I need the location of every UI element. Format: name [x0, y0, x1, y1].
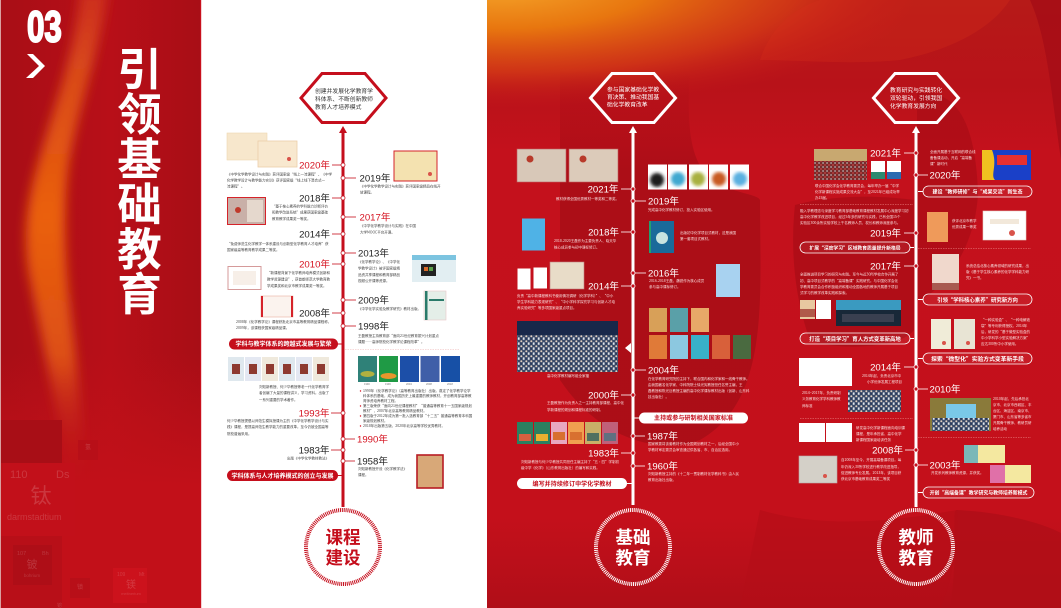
node: 2019: 2019年	[870, 228, 901, 240]
node: 1998: 王磊教授主持教育部“面向21世纪教育振兴计划重点	[358, 333, 439, 339]
node: 2013	[341, 248, 456, 284]
node: 1993: 何少华教授提倡以师范生模拟授课为主的《中学化学教学设计与实	[227, 418, 329, 424]
node: 2016	[631, 264, 740, 297]
group photo: 高中化学教材编写组全家福	[547, 373, 589, 379]
node: 1960: 刘知新教授主持的《十二年一贯制教材化学教科书》由人民	[648, 471, 739, 477]
node: 2020: 全面开展基于互联网的联合线	[930, 149, 976, 155]
node: 2000	[547, 390, 635, 413]
periodic table tiles: 109	[117, 572, 126, 578]
node: 2014	[799, 358, 918, 412]
textbook notes list: 家级规划教材。	[363, 418, 388, 424]
new curriculum training: 课程，是年承担省、高中化学	[856, 431, 902, 437]
pill: interdisciplinary development: 学科与教学体系的跨越式发展与繁荣	[236, 339, 332, 348]
node: 2021	[517, 149, 635, 202]
node: 1983: 刘知新教授与何少华教授共同担任主编主持了“五·四”学制初	[521, 459, 619, 465]
node: 2017: 式学习的教学改革实践和探索。	[800, 290, 849, 296]
textbooks 2004	[649, 308, 751, 359]
textbook notes list: 第三版荣获“面向21世纪课程教材”“普通高等教育十一五国家级规划	[363, 403, 472, 409]
new curriculum training: 新课程国家级培训任务	[856, 437, 891, 443]
textbook notes list: 科体系的基础，成为我国历史上最重要的教师教材，开创教育部高等教	[363, 393, 472, 399]
node: 2004: 由我国著名化学家、中科院院士徐光宪教授担任名誉主编，王	[648, 382, 743, 388]
circle label: teacher education: 教师	[898, 524, 934, 550]
microscale experiment patents: “一种实验盒”、“一种电解液	[981, 317, 1030, 323]
node: 1958: 刘知新教授开设《化学教学法》	[358, 466, 407, 472]
pill: teacher training ecosystem	[918, 186, 1032, 197]
node: 2008: 2008年《化学教学论》课程获批北京市高等教育精品课程称。	[236, 319, 331, 325]
node: 2017	[800, 254, 1029, 326]
node: 2020: 化学教学设计与教学能力实训》获评国家级“线上线下混合式一	[227, 178, 325, 184]
node: 1993: 践》课程，是提高师范生教学能力的重要改革。至今仍被全国高等	[227, 424, 329, 430]
node: 2016: 2016年	[648, 268, 679, 280]
node: 2009: 《中学化学实验及教学研究》教材出版。	[358, 306, 421, 312]
node: 1983: 出版《中学化学教材教法》	[287, 456, 329, 462]
timeline axis with arrow	[339, 126, 347, 507]
node: 2019: 放课程。	[360, 190, 374, 196]
circle label: basic education: 基础	[616, 524, 650, 550]
node: 2021: 办15届。	[815, 195, 829, 201]
node: 2017: 大学MOOC平台开课。	[360, 230, 395, 236]
node: 1983	[287, 444, 345, 462]
node: 1987: 1987年	[647, 430, 678, 442]
pill: project learning: 打造“项目学习”育人方式变革新高地	[809, 335, 901, 343]
node: 2010: 2010年	[930, 384, 961, 396]
node: 2018	[228, 192, 345, 224]
panel: basic education timeline	[517, 74, 751, 584]
node: 2017: 版《基于学生核心素养的化学学科能力研	[966, 269, 1029, 275]
hexagon heading: 参与国家基础化学教	[607, 84, 659, 94]
node: 2014: 师标准	[802, 403, 813, 409]
node: 2018: 第一套项目式教材。	[680, 236, 712, 242]
node: 1958: 1958年	[357, 456, 388, 468]
pill: core literacy: 引领“学科核心素养”研究新方向	[937, 296, 1018, 304]
node: 2010	[914, 384, 1032, 432]
textbook notes list	[360, 388, 473, 429]
node: 2018: 2018年	[299, 192, 330, 204]
circle label: course building: 课程	[326, 524, 360, 550]
node: 2014: 养实验研究”等多项国家级重点项目。	[517, 305, 576, 311]
node: 2018: “基于核心素养的学科能力诊断评价	[272, 204, 328, 210]
node: 2014: 小学优师发展工程项目	[867, 379, 902, 385]
node: 2014: 2014年	[588, 280, 619, 292]
node: 1990	[341, 434, 388, 446]
circle label: course building	[306, 510, 380, 584]
node: 2018: 和教学改进系统”成果获国家级基础	[272, 210, 328, 216]
pill: high-end lesson planning	[918, 487, 1034, 498]
microscale experiment patents: 中小学科学小型实验解决方案”	[981, 335, 1030, 341]
pill: micro experiment: 探索“微型化”实验方式变革新手段	[931, 354, 1024, 363]
node: 2019: 2019年	[360, 172, 391, 184]
hexagon heading	[590, 74, 676, 122]
pill: interdisciplinary development	[229, 338, 342, 350]
pill: teacher training ecosystem: 建设“教师研修”与“成果交流”新生态	[932, 189, 1023, 196]
node: 2008	[799, 444, 918, 483]
node: 2003: 开发系列教师教育资源，并获奖。	[931, 470, 984, 476]
new curriculum training	[799, 423, 905, 443]
node: 2014: 2014年起，负责北京市中	[862, 373, 902, 379]
node: 2019: 实验区300余所实验学校上千名教师人员，权长和教师深度参与。	[800, 220, 900, 226]
node: 2013: 品资共享课程和教育部精品	[358, 272, 400, 278]
circle label: teacher education	[879, 510, 953, 584]
node: 1987: 国家教委将该套教材作为全国规划教材之一，后经全国中小	[648, 441, 739, 447]
node: 2014: 2014年	[870, 362, 901, 374]
node: 2019: 完成高中化学教材修订，投入实验区使用。	[648, 207, 714, 213]
panel: red cover strip	[0, 0, 201, 608]
textbook notes list: 第四版于2012年成为第一批入选教育部“十二五”普通高等教育本科国	[363, 413, 473, 419]
pill: discipline founding: 学科体系与人才培养模式的创立与发展	[232, 471, 334, 480]
node: 2020: 《中学化学教学设计与实践》获评国家级“线上一流课程”、《中学	[227, 172, 332, 178]
node: 2013: 《化学教学论》、《中学化	[358, 259, 400, 265]
node: 2004: 技出版社）。	[648, 394, 669, 400]
hexagon heading: 教育研究与实践转化	[890, 85, 942, 94]
node: 2010: 教学资源建设”，获首都师范大学教育教	[267, 276, 330, 282]
node: 2018: 核心成员参与初中课标修订。	[554, 244, 600, 250]
textbook notes list: 育师资培养教材工程。	[363, 398, 398, 404]
microscale experiment patents	[931, 317, 1030, 349]
group photo	[517, 321, 618, 379]
node: 2013: 学教学设计》被评国家级精	[358, 266, 400, 272]
node: 2013: 2013年	[358, 248, 389, 260]
node: 2019	[341, 151, 441, 196]
pill: deep learning: 扩展“深度学习”区域教育质量提升新格局	[809, 245, 901, 252]
textbook editions 1990-2018: 2004	[406, 382, 412, 386]
node: 2019: 《中学化学教学设计与实践》获评国家级精品在线开	[360, 184, 441, 190]
node: 2020: 流课程”。	[227, 184, 244, 190]
panel: teacher education timeline	[799, 74, 1034, 584]
node: 2014: 学生学科能力表现研究”、“中小学科学探究学习与创新人才培	[517, 299, 615, 305]
node: 2010: 开展骨干教师、教研员研	[993, 420, 1032, 426]
node: 1983	[521, 448, 635, 471]
hexagon heading: 育决策、推动我国基	[607, 92, 659, 101]
periodic table tiles: meitnerium	[121, 591, 142, 596]
node: 2010: 学成果奖和北京市教学成果奖一等奖。	[267, 283, 326, 289]
pill: national standards	[634, 412, 748, 424]
node: 1960	[631, 460, 739, 483]
node: 2021: 教材获得全国优秀教材一等奖和二等奖。	[556, 196, 619, 202]
node: 2020	[914, 149, 1031, 182]
node: 2020: 备备课活动，开启“高端备	[930, 155, 972, 161]
pill: national standards: 主持或参与研制相关国家标准	[654, 413, 733, 422]
pill: deep learning	[800, 242, 914, 253]
node: 2019: 优秀成果一等奖	[952, 224, 977, 230]
textbook notes list: 教材”，2007年北京高等教育精品教材。	[363, 408, 427, 414]
pill: core literacy	[918, 294, 1032, 305]
periodic table tiles	[3, 440, 147, 608]
hexagon heading: 教育人才培养模式	[315, 102, 362, 111]
textbook editions 1990-2018: 2008	[426, 382, 432, 386]
periodic table tiles: 110	[10, 469, 28, 481]
node: 2017: 《中学化学教学设计与实践》在中国	[360, 223, 416, 229]
node: 2014: 负责“高中新课程教科书使用情况调研（化学学科）”、“中小	[517, 293, 614, 299]
node: 2018: 教育教学成果奖一等奖。	[272, 216, 310, 222]
node: 2017: 系统总结北核心素养领域的研究成果，出	[966, 263, 1029, 269]
node: 2014: 国家级高等教育教学成果二等奖。	[227, 247, 280, 253]
textbook editions 1990-2018: 1996	[385, 382, 391, 386]
node: 2008: 年仍深入30所学校进行教学改进指导，	[841, 464, 901, 470]
node: 2008: 2008年	[299, 308, 330, 320]
node: 2017: 2017年	[870, 260, 901, 272]
Liu Zhixin's lecture books: 者创编了大量的课程讲义，学习资料。出版了	[259, 390, 329, 396]
node: 1983: 级中学《化学》（山东教育出版社）的编写和实践。	[521, 465, 600, 471]
microscale experiment patents: 应达300所中小学使用。	[981, 341, 1018, 347]
timeline axis with arrow	[629, 126, 637, 505]
node: 2017: 初、高中项目式教学的“高端备课”实践研究。与中国化学会化	[800, 278, 898, 284]
periodic table tiles: 镇	[77, 583, 83, 591]
node: 2008: 获北京市基础教育成果奖二等奖	[841, 476, 890, 482]
node: 2019: 获评北京市教学	[952, 218, 977, 224]
node: 2019: 融入学教理念与深度学习教育部基础教育课程教材发展中心深度学习初	[800, 208, 909, 214]
periodic table tiles: Mt	[139, 572, 145, 578]
pill: textbooks	[517, 478, 632, 489]
periodic table tiles: 铍	[26, 558, 38, 571]
node: 1998	[341, 320, 439, 345]
node: 2004: 2004年	[648, 364, 679, 376]
node: 2017	[341, 212, 416, 236]
node: 2003: 2003年	[930, 460, 961, 472]
node: 2018: 出版初中化学项目式教材，这是我国	[680, 230, 736, 236]
textbook editions 1990-2018: 2018	[447, 382, 453, 386]
node: 1983: 1983年	[588, 448, 619, 460]
node: 2018: 2018年	[588, 226, 619, 238]
pill: high-end lesson planning: 开创“高端备课”教学研究与教师培养新模式	[930, 490, 1028, 497]
Liu Zhixin's lecture books: 刘知新教授、何少华教授等老一代化学教育学	[259, 384, 329, 390]
node: 2010: 2010年起，先后承担北	[993, 396, 1029, 402]
node: 2010: 京市、北京市西城区、丰	[993, 402, 1032, 408]
node: 2000: 学新课程的规划和课程标准的研制。	[547, 407, 603, 413]
node: 2010: 台区、海淀区、南京市、	[993, 408, 1032, 414]
node: 2010: 厦门市、山东省等多省市	[993, 414, 1032, 420]
node: 2021: 2021年	[870, 148, 901, 160]
node: 2017: 全面推进项目学习的研究与实践。至今与近30所学校合作开展了	[800, 272, 899, 278]
node: 2008: 2009年，该课程获国家级精品课。	[236, 325, 289, 331]
node: 2019: 高中化学教学改进项目，经过5年多的研究与实践，已有全国15个	[800, 214, 901, 220]
Liu Zhixin's lecture books	[228, 357, 329, 403]
vertical title: 基	[117, 123, 162, 188]
hexagon heading	[301, 74, 386, 122]
textbooks 1987 row	[517, 422, 618, 444]
node: 1990: 1990年	[357, 434, 388, 446]
periodic table tiles: Ds	[56, 469, 70, 481]
node: 2008	[236, 296, 345, 331]
node: 1983: 1983年	[299, 444, 330, 456]
vertical title: 础	[117, 168, 162, 233]
node: 2016: 参与高中课标修订。	[649, 284, 680, 290]
node: 2004: 磊教授和陈光巨教授主编的高中化学课标教材出版（创新、山东科	[648, 388, 750, 394]
node: 2000: 2000年	[588, 390, 619, 402]
node: 2010: “新课程背景下化学教师培养模式创新和	[267, 270, 330, 276]
vertical title: 育	[117, 258, 162, 323]
node: 2021: 2021年	[588, 184, 619, 196]
hexagon heading: 双轮驱动，引领我国	[890, 93, 942, 102]
periodic table tiles: darmstadtium	[7, 512, 62, 522]
panel: red background right	[487, 0, 1061, 608]
node: 2020: 2020年	[930, 170, 961, 182]
node: 1993	[227, 408, 345, 437]
microscale experiment patents: 后，研发的“基于微型实验盒的	[981, 329, 1030, 335]
textbook notes list: 1990年《化学教学论》（高等教育出版社）出版。奠定了化学教学论学	[363, 388, 471, 394]
circle label: course building: 建设	[326, 545, 361, 570]
node: 2004: 在化学教育研究院的主持下，联合国内和化学家和一线骨干教师。	[648, 376, 750, 382]
hexagon heading: 创建并发展化学教育学	[315, 86, 373, 95]
node: 2019: 2019年	[648, 196, 679, 208]
textbook notes list: 2018年出版第五版，2020年北京高等学校优秀教材。	[363, 423, 445, 429]
pill: project learning	[800, 333, 914, 344]
node: 2019	[800, 208, 1026, 242]
periodic table tiles: 107	[17, 551, 26, 557]
vertical title: 教	[117, 213, 162, 278]
node: 2021	[814, 148, 918, 201]
node: 1987: 学教材审定委员会审查通过供各省、市、自治区选用。	[648, 447, 732, 453]
microscale experiment patents: 袋”等专利获得授权。2014年	[981, 323, 1028, 329]
periodic table tiles: 氢	[85, 443, 91, 451]
node: 1998: 1998年	[358, 320, 389, 332]
node: 2019	[631, 164, 749, 213]
node: 2021: 联合中国化学会化学教育委员会，每年举办一届“中学	[815, 183, 899, 189]
hexagon heading: 础化学教育改革	[607, 100, 648, 108]
node: 2000: 王磊教授作为负责人之一主持教育部课程、高中化	[547, 400, 624, 406]
hexagon heading: 科体系、不断创新教师	[315, 94, 373, 103]
pill: textbooks: 编写并持续修订中学化学教材	[532, 479, 612, 488]
node: 2016: 2016-2018王磊、魏锐作为核心成员	[649, 278, 705, 284]
periodic table tiles: bohrium	[24, 573, 40, 578]
node: 2014: 2014~2017年，负责研制	[802, 390, 841, 396]
node: 2014: 义务教育化学学科教师教	[802, 396, 841, 402]
node: 2021: 化学新课程实施成果交流大会”，至2021年已组成功举	[815, 189, 900, 195]
node: 2009	[341, 291, 446, 320]
node: 1998: 课题——高师院校化学教学论课程改革”。	[358, 339, 424, 345]
node: 2018: 2018-2020王磊作为主要负责人、晓天华	[554, 238, 617, 244]
hexagon heading: 化学教育发展方向	[890, 101, 937, 110]
circle label: basic education	[596, 510, 670, 584]
node: 1993: 院校普遍采用。	[227, 431, 252, 437]
periodic table tiles: 钛	[30, 485, 52, 508]
node: 2014	[517, 262, 635, 311]
new curriculum training: 研发高中化学新课程面向培训课	[856, 425, 905, 431]
periodic table tiles: 镁	[126, 578, 136, 591]
vertical title: 引	[117, 33, 162, 98]
node: 1960: 教育出版社出版。	[648, 477, 676, 483]
node: 2017: 2017年	[360, 212, 391, 224]
node: 2020: 课”新时代	[930, 161, 948, 167]
circle label: basic education: 教育	[616, 545, 650, 570]
vertical title: 领	[117, 78, 162, 143]
node: 1958	[341, 455, 443, 488]
circle label: teacher education: 教育	[898, 545, 934, 570]
node: 2020	[227, 133, 345, 190]
node: 2010: 2010年	[299, 258, 330, 270]
node: 1960: 1960年	[647, 460, 678, 472]
node: 2010: 培养活动	[993, 426, 1007, 432]
textbook editions 1990-2018: 1990	[364, 382, 370, 386]
node: 2009: 2009年	[358, 294, 389, 306]
node: 2014	[227, 228, 345, 253]
textbook editions 1990-2018	[358, 356, 460, 386]
node: 2018	[522, 218, 736, 253]
node: 2020: 2020年	[299, 160, 330, 172]
timeline axis with arrow	[912, 126, 920, 507]
section number: 03	[27, 4, 62, 52]
node: 2008: 2008年	[872, 444, 903, 456]
node: 1987	[631, 430, 739, 453]
node: 1958: 课程。	[358, 472, 368, 478]
icon: chevron	[26, 54, 45, 78]
node: 2017: 究》一书。	[966, 275, 984, 281]
node: 2008: 自2008年至今，开展高端备课项目。每	[841, 457, 902, 463]
node: 2008: 促进教师专业发展。2013年，该项目获	[841, 470, 902, 476]
node: 2004	[631, 364, 750, 400]
Liu Zhixin's lecture books: 一系列重要的学术著作。	[259, 397, 298, 403]
node: 2017: 学教育委员会合作积极组织和推动全国各地的教师开展基于项目	[800, 284, 898, 290]
panel: curriculum development timeline	[200, 0, 488, 608]
node: 2003	[914, 445, 1031, 483]
node: 2014: 2014年	[299, 228, 330, 240]
pill: micro experiment	[918, 353, 1032, 364]
node: 2014: “免费师范生化学教学一体系建设与创新型化学教育人才培养”获	[227, 241, 329, 247]
node: 2013: 视频公开课等资源。	[358, 278, 390, 284]
node: 2010	[228, 258, 345, 290]
node: 1993: 1993年	[299, 408, 330, 420]
periodic table tiles: Bh	[42, 551, 49, 557]
hexagon heading	[874, 74, 958, 122]
